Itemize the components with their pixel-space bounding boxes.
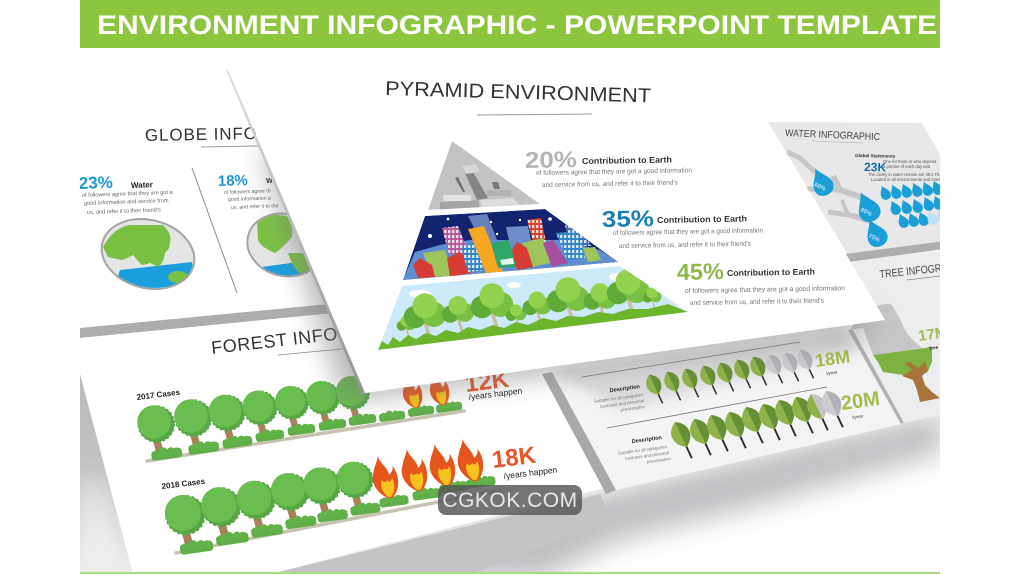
leaf row 2: Suitable for all categories: [618, 444, 668, 456]
2018 cases row: /years happen: [503, 464, 558, 481]
pyramid heading: PYRAMID ENVIRONMENT: [385, 78, 651, 107]
leaf row 1: 1year: [825, 369, 838, 376]
grass: [378, 304, 688, 350]
tree illustration: [850, 304, 940, 402]
2017 cases row: 12K: [463, 366, 511, 398]
leaf row 2: 20M: [840, 388, 881, 415]
water stat 18%: W: [266, 178, 273, 185]
leaf row 1: presentation: [621, 404, 646, 412]
globe heading: GLOBE INFO: [145, 124, 258, 145]
panel: globe infographic: [80, 127, 310, 294]
leaf row 1: 18M: [814, 346, 851, 371]
2017 cases row: 2017 Cases: [136, 388, 181, 402]
globe: americas: [246, 212, 310, 278]
leaf row 1: Suitable for all categories: [594, 392, 644, 404]
drops with percentages: 75%: [867, 233, 881, 244]
leaf row 1: business and personal: [600, 398, 644, 409]
water stat 18%: 18%: [218, 172, 248, 190]
header banner: ENVIRONMENT INFOGRAPHIC - POWERPOINT TEMPLATE: [97, 10, 937, 40]
stat 17M: Tree: [928, 345, 939, 351]
main card shadow: [262, 150, 880, 400]
divider: [192, 168, 237, 293]
water stat 23%: good information and service from: [84, 198, 169, 207]
water heading: WATER INFOGRAPHIC: [785, 128, 880, 143]
panel: forest infographic: [80, 312, 605, 574]
water stat 23%: of followers agree that they are got a: [82, 190, 174, 199]
forest / description separator: [542, 372, 616, 494]
stat 20%: and service from us, and refer it to their friend's: [542, 180, 679, 189]
stat 18K: 18K: [490, 442, 538, 474]
forest heading: FOREST INFO: [210, 324, 339, 358]
stat 20%: 20%: [525, 146, 577, 173]
pyramid top tier: industry: [428, 141, 540, 210]
water stat 18%: [218, 174, 278, 210]
water stat 18%: good information a: [228, 195, 271, 203]
description / tree separator: [848, 330, 906, 424]
stat 45%: and service from us, and refer it to their friend's: [690, 298, 825, 307]
drops with percentages: 60%: [813, 182, 827, 193]
stat 23K: The clarity in water remain are 48.2 Flood waters: [868, 172, 959, 177]
stat 23K: One for them or who depend: [883, 159, 937, 164]
stat 35%: Contribution to Earth: [657, 213, 747, 225]
2017 cases row: /years happen: [468, 385, 523, 402]
watermark: CGKOK.COM: [442, 489, 578, 512]
stat 35%: and service from us, and refer it to their friend's: [619, 241, 752, 250]
flames: [373, 439, 483, 498]
stat 45%: [677, 258, 845, 307]
woodland: [397, 269, 661, 351]
pyramid middle tier: city at night: [403, 209, 618, 280]
water stat 18%: of followers agree th: [224, 188, 271, 196]
stat 17M: [918, 328, 940, 350]
stat 35%: of followers agree that they are got a good information: [613, 227, 763, 237]
leaf row 2: Description: [631, 435, 663, 445]
stat 45%: Contribution to Earth: [727, 266, 815, 278]
tree heading: TREE INFOGR: [879, 263, 942, 281]
water stat 23%: [80, 176, 173, 214]
background shadows: [80, 374, 940, 572]
stat 35%: [602, 205, 763, 250]
stat 45%: of followers agree that they are got a good information: [685, 285, 845, 295]
stat 23K: [855, 154, 940, 181]
leaf row 2: [618, 387, 881, 464]
stat 20%: Contribution to Earth: [582, 154, 672, 166]
water stat 18%: us, and refer it to the: [231, 203, 279, 211]
water stat 23%: Water: [131, 180, 153, 190]
pipes: [787, 152, 870, 222]
drops with percentages: 80%: [859, 207, 873, 218]
stat 23K: a portion of each day and: [883, 164, 931, 169]
globe: asia: [100, 218, 196, 290]
bottom green strip: [80, 572, 940, 574]
panel: water infographic: [768, 122, 940, 254]
stat 20%: [525, 146, 692, 189]
stat 23K: 23K: [864, 160, 887, 174]
2018 cases row: [161, 439, 558, 555]
water / tree separator: [845, 241, 945, 262]
leaf row 2: business and personal: [625, 450, 669, 461]
stat 45%: 45%: [677, 258, 724, 285]
stage: slide collage: [78, 48, 959, 574]
panel: tree infographic: [850, 250, 940, 423]
pyramid bottom tier: forest: [378, 266, 688, 351]
2018 cases row: 2018 Cases: [161, 477, 206, 491]
stat 23K: Global Statements: [855, 153, 896, 159]
leaf row 2: presentation: [647, 456, 672, 464]
leaf row 2: 1year: [851, 413, 864, 420]
leaf row 1: [594, 346, 851, 412]
stat 35%: 35%: [602, 205, 654, 232]
water stat 23%: 23%: [78, 173, 113, 193]
stat 23K: Located in all environments and moreover: [871, 177, 950, 182]
header banner: [80, 0, 940, 48]
stat 17M: 17M: [917, 324, 948, 345]
droplet grid: [880, 180, 940, 228]
stat 20%: of followers agree that they are got a good information: [536, 167, 692, 177]
water stat 23%: us, and refer it to their friend's: [87, 207, 161, 216]
panel separator band: [80, 304, 328, 338]
leaf row 1: Description: [609, 384, 641, 394]
panel: description leaves: [552, 332, 902, 490]
2017 cases row: [136, 366, 523, 461]
drops with percentages: [814, 168, 888, 247]
panel: pyramid environment card: [228, 68, 885, 393]
